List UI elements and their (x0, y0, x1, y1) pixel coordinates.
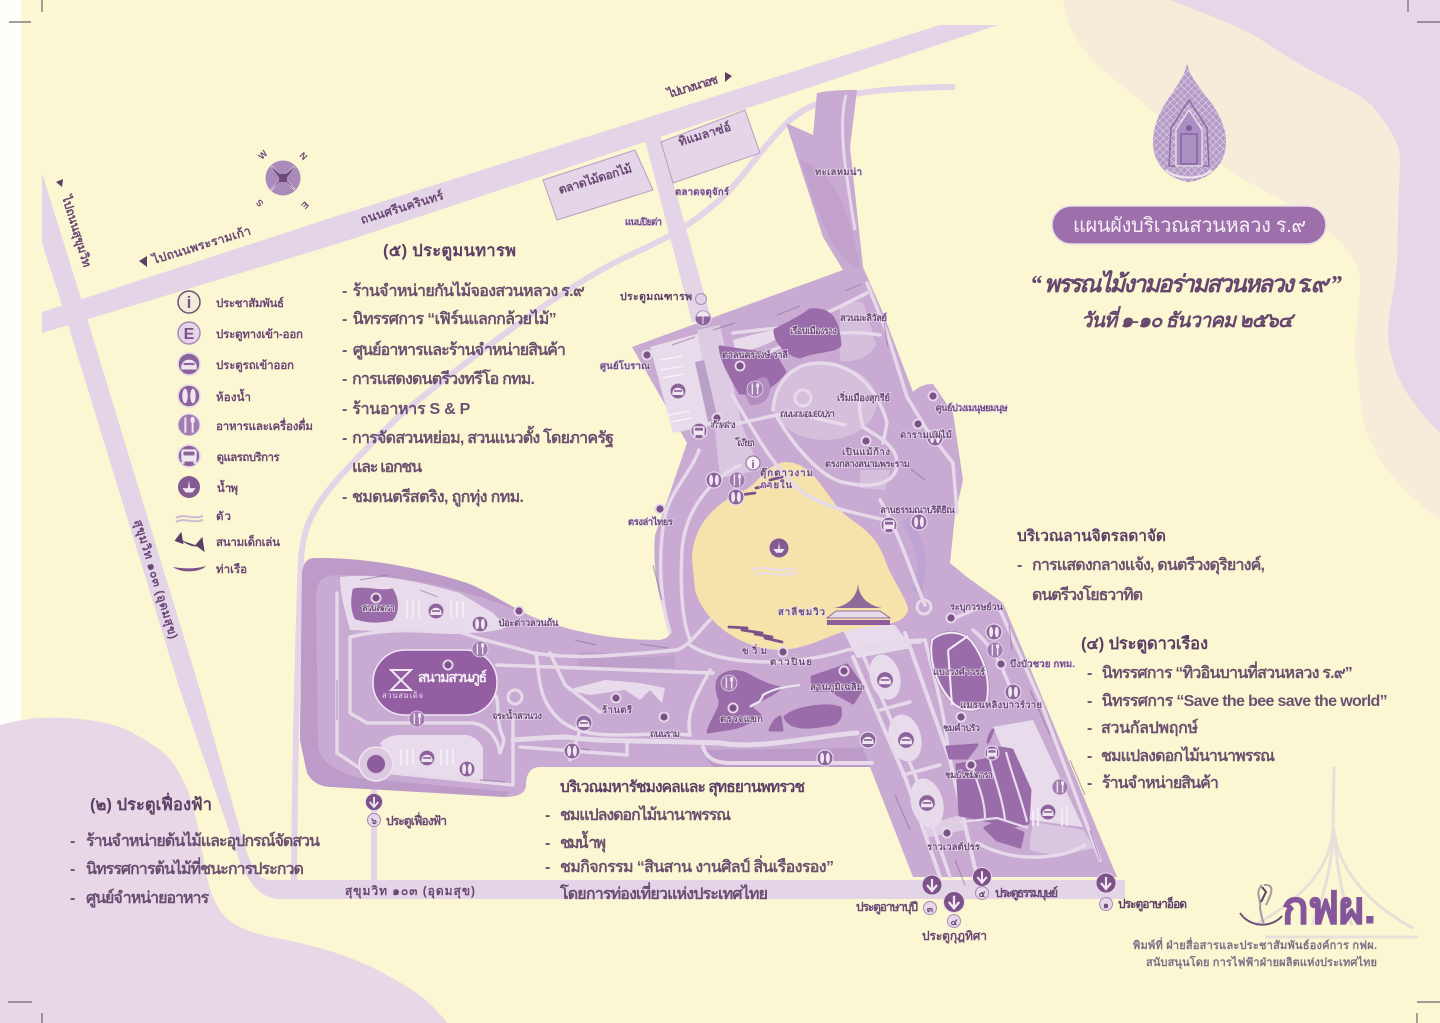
text block: Chitralada: การแสดงกลางแจ้ง, ดนตรีวงดุริยางค์, (1032, 555, 1265, 575)
map icons: parking (419, 383, 1056, 820)
map place labels: ศูนย์โบราณ (600, 360, 650, 373)
text block: gate 5: - (342, 371, 347, 388)
text block: gate 4: นิทรรศการ “ทิวอินบานที่สวนหลวง ร.๙” (1102, 661, 1353, 682)
text block: gate 5: การแสดงดนตรีวงทรีโอ กทม. (352, 368, 535, 388)
text block: gate 2: - (70, 861, 75, 878)
text block: south plaza: ชมกิจกรรม “สินสาน งานศิลป์ สิ่นเรืองรอง” (560, 855, 834, 876)
legend: playground (175, 533, 280, 551)
legend: information (178, 291, 284, 313)
map place labels: ตุ๊กตาวงาม (760, 467, 813, 479)
map place labels: ชมคำปรัว (943, 722, 980, 734)
map place labels: ลานภูมิเฉลิม (810, 682, 863, 694)
roundabout (359, 747, 393, 781)
map place labels: ระบุกวรษย์วน (950, 601, 1004, 613)
legend (173, 291, 313, 576)
text block: gate 2: ร้านจำหน่ายต้นไม้และอุปกรณ์จัดสวน (86, 831, 320, 851)
road labels: ไปถนนสุขุมวิท (58, 192, 95, 269)
legend: boat pier (173, 563, 247, 576)
logo (1240, 884, 1376, 933)
map place labels: สวนมะลิวัลย์ (840, 312, 887, 324)
legend: food: อาหารและเครื่องดื่ม (216, 417, 313, 433)
central zigzag light band (567, 680, 665, 703)
west darker field (300, 558, 533, 797)
decorative wave: purple top right (1170, 0, 1440, 433)
road labels: ไปถนนพระรามเก้า (149, 223, 252, 267)
map icon: lake fountain (770, 538, 788, 558)
map place labels: แบงวงคำวรร์ (933, 666, 986, 678)
tower watermark (1255, 767, 1418, 937)
map place labels: ราวเวลต์ปรร (927, 841, 981, 853)
map place labels: ขวิ่ม (742, 643, 767, 657)
map place labels: ร้านตรี (602, 704, 633, 716)
title: วันที่ ๑-๑๐ ธันวาคม ๒๕๖๔ (1081, 306, 1296, 332)
garden: south (708, 672, 780, 732)
main north drive (695, 325, 742, 430)
legend: restroom: ห้องน้ำ (216, 388, 251, 404)
road labels: ไปบางนาอช (664, 71, 720, 101)
text block: gate 5: ชมดนตรีสตริง, ถูกทุ่ง กทม. (352, 487, 524, 508)
emblem (1153, 62, 1226, 182)
park base shape (300, 90, 1117, 877)
road: gate spur (371, 780, 377, 880)
title pill: แผนผังบริเวณสวนหลวง ร.๙ (1073, 215, 1306, 237)
lake bridge (752, 568, 798, 575)
building: market: ตลาดไม้ดอกไม้ (556, 160, 634, 197)
garden: northwest (720, 347, 785, 393)
legend: entrance: ประตูทางเข้า-ออก (216, 328, 303, 342)
garden: north pavilion (775, 310, 840, 357)
garden light stripes (960, 752, 1028, 828)
text block: gate 4 (1081, 634, 1388, 792)
text block: south plaza (545, 778, 834, 903)
map place labels: ทะเลหมน่า (815, 167, 862, 178)
buildings north of the park (543, 110, 760, 220)
text block: south plaza: บริเวณมหารัชมงคลและ สุทธยานพทรวช (560, 778, 805, 797)
road: curved connector (294, 87, 955, 880)
credit text (1133, 937, 1377, 970)
text block: gate 2: (๒) ประตูเฟื่องฟ้า (90, 792, 212, 816)
map place labels: ตรวจแขก (720, 714, 763, 725)
water north (800, 160, 860, 268)
stream (905, 520, 922, 592)
stadium (373, 650, 497, 715)
map icons: food (409, 381, 1068, 795)
legend: bridge (176, 510, 231, 523)
light areas (340, 333, 1095, 854)
map place labels: เปิ่นแม้ก้าง (842, 444, 890, 458)
map place labels: ตาวปิ่นย (770, 654, 812, 668)
map place labels: ป่อะต่าวลวนถ้น (498, 617, 559, 629)
text block: south plaza: - (545, 807, 550, 824)
legend: food (178, 414, 313, 436)
text block: gate 5: - (342, 283, 347, 300)
map place labels: ถนนถนอม60ปรา (780, 408, 835, 420)
map icon: information point: i (751, 459, 755, 471)
text block: gate 4: ชมแปลงดอกไม้นานาพรรณ (1101, 746, 1275, 765)
road labels: แนบปิยด่า (625, 216, 662, 228)
stadium: สวนสมเด็จ (382, 690, 423, 700)
credit text: พิมพ์ที่ ฝ่ายสื่อสารและประชาสัมพันธ์องค์การ กฟผ. (1133, 937, 1377, 952)
dashed road markings (337, 284, 1100, 885)
legend: parking: ประตูรถเข้าออก (216, 359, 294, 373)
text block: gate 5: ร้านอาหาร S & P (352, 400, 471, 418)
map place labels: ถนนราม (650, 729, 680, 740)
text block: gate 5: (๕) ประตูมนทารพ (383, 242, 516, 262)
road labels: สุขุมวิท ๑๐๓ (อุดมสุข) (130, 518, 181, 641)
legend: information: ประชาสัมพันธ์ (216, 296, 284, 310)
text block: Chitralada (1017, 527, 1265, 604)
map icons: dots (370, 350, 1006, 838)
gate: center south: ๔ (951, 917, 958, 927)
gate: Fueang Fa: ประตูเฟื่องฟ้า (386, 812, 447, 829)
text block: south plaza: ชมแปลงดอกไม้นานาพรรณ (560, 805, 731, 824)
map place labels: ศูนย์ปวงเมนุษยมนุษ (936, 402, 1008, 415)
text block: Chitralada: บริเวณลานจิตรลดาจัด (1017, 527, 1166, 545)
building: market (543, 150, 653, 220)
text block: gate 2: - (70, 833, 75, 850)
roads inside the park (337, 283, 1100, 877)
text block: gate 5: - (342, 342, 347, 359)
boat piers on the lake (729, 477, 782, 642)
gate: east south: ๕ (979, 889, 986, 899)
building: mall: ทิแมลาซ่อ์ (677, 120, 733, 149)
map icon: information point (746, 456, 760, 471)
compass: N (298, 150, 309, 162)
map place labels: ประตูมณฑารพ (620, 291, 692, 304)
gate: east south (972, 868, 1058, 901)
gate: west south: ประตูอาษาบุปี (856, 900, 918, 915)
road labels (56, 71, 732, 899)
building: mall (661, 110, 760, 183)
text block: gate 2: ศูนย์จำหน่ายอาหาร (86, 888, 209, 909)
text block: gate 4: ร้านจำหน่ายสินค้า (1102, 774, 1219, 792)
garden: south east strips (947, 745, 977, 758)
decorative wave: purple bottom left (0, 718, 447, 1023)
text block: gate 5: - (342, 401, 347, 418)
map place labels: แมรนหลิงบาวร์วาย (960, 699, 1042, 711)
title pill (1052, 206, 1326, 244)
gate: far east: ๑ (1103, 900, 1109, 910)
gate: far east (1096, 873, 1187, 912)
decorative wave: beige top right (1063, 0, 1440, 520)
gate: Fueang Fa (366, 794, 447, 829)
left paper margin (0, 0, 21, 1023)
map place labels: ชมบัวชมดารา (945, 770, 993, 781)
text block: Chitralada: - (1017, 557, 1022, 574)
road labels: ตลาดจตุจักร์ (675, 186, 730, 198)
text block: Chitralada: ดนตรีวงโยธวาทิต (1032, 584, 1143, 604)
map place labels: ลานธรรมณาปริติธิณ (880, 504, 955, 516)
lake (692, 462, 908, 650)
map icon: north gate (695, 294, 711, 326)
map place labels: ตรงล่าไทยร (628, 516, 674, 528)
text block: gate 5: การจัดสวนหย่อม, สวนแนวตั้ง โดยภาครัฐ (352, 425, 614, 448)
north soft panels (733, 302, 890, 490)
text block: south plaza: โดยการท่องเที่ยวแห่งประเทศไทย (559, 882, 768, 903)
external roads (42, 25, 1125, 899)
text block: gate 5: - (342, 311, 347, 328)
road labels: สุขุมวิท ๑๐๓ (อุดมสุข) (345, 884, 475, 899)
map place labels: ภายใน (760, 479, 792, 491)
gate: west south: ๓ (927, 904, 933, 914)
credit text: สนับสนุนโดย การไฟฟ้าฝ่ายผลิตแห่งประเทศไทย (1146, 955, 1377, 970)
map place labels: โถงวิธยา (734, 437, 755, 449)
legend: information: i (187, 293, 191, 312)
park map (300, 90, 1117, 885)
road: Ratchadaphisek diagonal (42, 25, 998, 333)
legend: bridge: ตัว (216, 510, 231, 523)
south edge darker band (700, 748, 870, 767)
compass: E (299, 200, 311, 211)
text block: gate 5: - (342, 430, 347, 447)
road: Sukhumvit 103 and bottom road (42, 173, 1125, 899)
map place labels: บึงบัวชวย กทม. (1010, 658, 1075, 670)
legend: restroom (178, 385, 251, 407)
text block: gate 5: ศูนย์อาหารและร้านจำหน่ายสินค้า (353, 340, 566, 361)
text block: gate 5: นิทรรศการ “เฟิร์นแลกกล้วยไม้” (353, 309, 557, 328)
map place labels (362, 167, 1075, 853)
legend: boat pier: ท่าเรือ (216, 563, 247, 576)
text block: gate 4: (๔) ประตูดาวเรือง (1081, 634, 1208, 655)
text block: gate 4: สวนกัลปพฤกษ์ (1101, 718, 1198, 737)
gate: west south (856, 875, 942, 915)
garden: west pond (353, 589, 396, 621)
logo: กฟผ. (1282, 884, 1376, 933)
parking stripes (401, 356, 1067, 826)
title: “ พรรณไม้งามอร่ามสวนหลวง ร.๙ ” (1030, 270, 1342, 298)
compass: W (256, 148, 270, 161)
text block: gate 4: - (1087, 748, 1092, 765)
map place labels: ตรงกลางสนามพระราม (825, 459, 910, 470)
dark gardens (353, 310, 1030, 847)
text block: south plaza: - (545, 835, 550, 852)
title (1030, 270, 1342, 332)
map place labels: เริ่มเมืองสุกรีย์ (837, 390, 890, 404)
text block: gate 4: - (1087, 720, 1092, 737)
compass: S (254, 197, 265, 209)
legend: parking (178, 353, 294, 375)
text block: gate 5: ร้านจำหน่ายกันไม้จองสวนหลวง ร.๙ (353, 281, 585, 300)
map icons: restrooms (459, 430, 1021, 777)
text block: gate 2: นิทรรศการต้นไม้ที่ชนะการประกวด (86, 857, 304, 878)
gates (366, 794, 1187, 944)
legend: fountain (178, 476, 238, 498)
text block: gate 5 (342, 242, 614, 508)
gate: far east: ประตูอาษาอ็อด (1118, 896, 1187, 912)
text block: south plaza: ชมน้ำพุ (560, 830, 606, 853)
compass (254, 148, 311, 211)
legend: service vehicle (178, 445, 280, 467)
text block: gate 2: - (70, 890, 75, 907)
text block: gate 2 (70, 792, 320, 909)
gate: east south: ประตูธรรมบุษย์ (995, 886, 1058, 901)
text block: gate 4: - (1087, 693, 1092, 710)
road labels: ถนนศรีนครินทร์ (359, 188, 446, 227)
text block: gate 4: นิทรรศการ “Save the bee save the world” (1102, 692, 1388, 710)
legend: entrance: E (184, 326, 195, 343)
legend: entrance (178, 322, 303, 344)
map place labels: สาลีชมวิว (778, 606, 825, 618)
text block: gate 5: และ เอกชน (352, 459, 422, 476)
gate: center south: ประตูกุฎทิศา (922, 929, 987, 944)
text block: gate 4: - (1087, 665, 1092, 682)
gate: center south (922, 892, 987, 944)
legend: fountain: น้ำพุ (217, 479, 238, 496)
text block: gate 4: - (1087, 775, 1092, 792)
legend: service vehicle: ดูแลรถบริการ (217, 451, 280, 465)
map place labels: เก้าหล่าง (711, 419, 736, 431)
map place labels: จระน้ำสวนวง (492, 708, 542, 722)
map place labels: สวนลดวา (362, 603, 395, 614)
garden: east oval (931, 633, 988, 710)
map place labels: ตาลนครวงษ์ วาลี (722, 349, 788, 361)
road: north access (645, 135, 712, 322)
text block: gate 5: - (342, 489, 347, 506)
map place labels: เรือนเมืองราง (790, 325, 837, 337)
map icons: buses (691, 423, 999, 760)
central ring roundabouts (508, 390, 931, 704)
text block: south plaza: - (545, 859, 550, 876)
map place labels: ดารามแผ่ไม้ (900, 429, 952, 441)
stadium: สนามสวนภูธ์ (418, 669, 487, 686)
gate: Fueang Fa: ๖ (370, 816, 377, 826)
pavilion (827, 582, 890, 625)
legend: playground: สนามเด็กเล่น (216, 534, 280, 549)
